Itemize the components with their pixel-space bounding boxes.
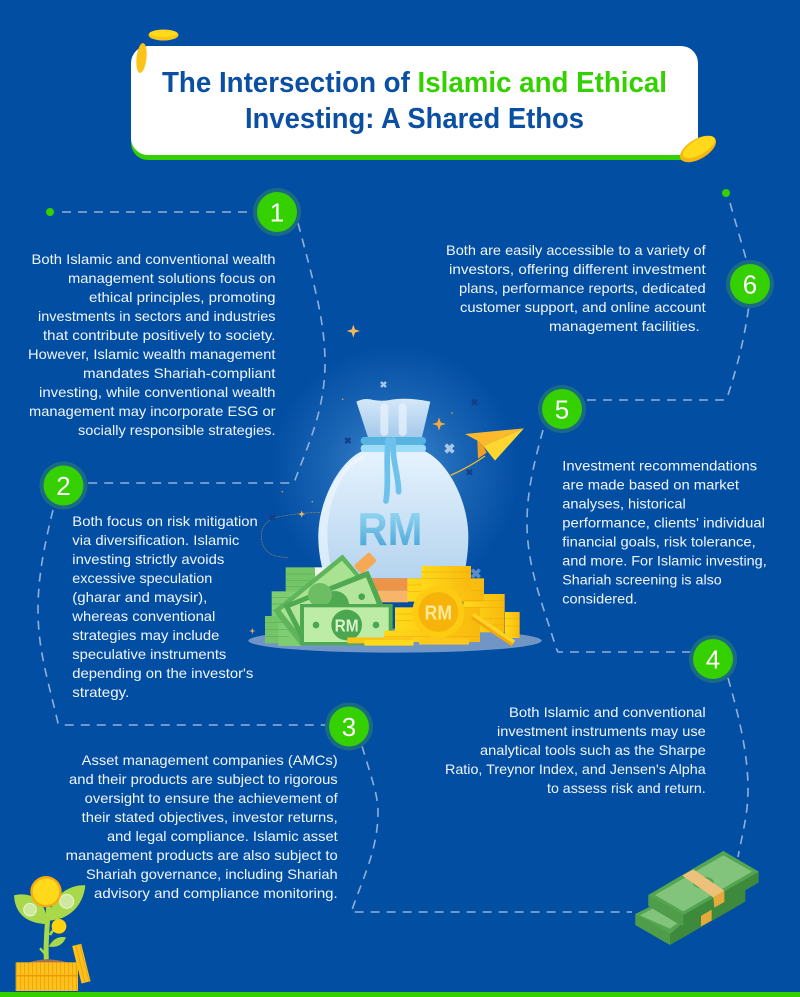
bottom green bar — [0, 992, 800, 997]
text block 3: Asset management companies (AMCs) — [82, 752, 338, 768]
text block 1: management may incorporate ESG or — [29, 403, 276, 419]
text block 5: and more. For Islamic investing, — [562, 553, 767, 569]
title text: The Intersection of Islamic and Ethical — [162, 67, 667, 99]
text block 4: to assess risk and return. — [547, 780, 706, 796]
text block 3: management products are also subject to — [66, 847, 338, 863]
text block 6 — [446, 242, 706, 334]
text block 5: analyses, historical — [562, 496, 686, 512]
number badge 6: 6 — [743, 270, 757, 300]
text block 4: Both Islamic and conventional — [509, 704, 706, 720]
text block 4: analytical tools such as the Sharpe — [480, 742, 706, 758]
number badge 3: 3 — [342, 712, 356, 742]
text block 2 — [71, 513, 258, 700]
text block 2: strategy. — [72, 684, 129, 700]
large RM coin — [412, 586, 464, 638]
icon: stacked banknotes — [635, 851, 759, 945]
text block 2: depending on the investor's — [72, 665, 253, 681]
sparkles and crosses — [249, 325, 480, 634]
text block 1: that contribute positively to society. — [43, 327, 276, 343]
text block 3: and legal compliance. Islamic asset — [107, 828, 338, 844]
text block 2: speculative instruments — [72, 646, 226, 662]
text block 2: strategies may include — [72, 627, 220, 643]
orange bundles — [354, 552, 408, 602]
text block 6: Both are easily accessible to a variety of — [446, 242, 706, 258]
text block 5: Investment recommendations — [562, 458, 757, 474]
text block 6: management facilities. — [549, 318, 700, 334]
banknotes — [273, 554, 393, 645]
text block 1 — [28, 251, 276, 438]
bag body — [318, 451, 468, 578]
number badge 6 — [726, 260, 774, 308]
title card — [131, 46, 698, 160]
text block 3: Shariah governance, including Shariah — [86, 866, 338, 882]
text block 5: Shariah screening is also — [562, 572, 722, 588]
paper plane and trails — [261, 428, 524, 557]
title text — [162, 67, 667, 135]
icon: plant growing from coin stack — [14, 876, 91, 991]
text block 1: Both Islamic and conventional wealth — [32, 251, 276, 267]
text block 1: However, Islamic wealth management — [28, 346, 276, 362]
number badge 3 — [325, 702, 373, 750]
bag tie — [361, 437, 426, 444]
text block 5 — [562, 458, 767, 607]
cash stacks — [265, 567, 334, 646]
number badge 4: 4 — [706, 644, 720, 674]
number badge 5 — [538, 385, 586, 433]
text block 1: investing, while conventional wealth — [39, 384, 276, 400]
text block 1: mandates Shariah-compliant — [83, 365, 276, 381]
title text: Investing: A Shared Ethos — [245, 103, 584, 135]
text block 2: whereas conventional — [71, 608, 215, 624]
glow behind money bag — [270, 345, 520, 595]
text block 4 — [445, 704, 706, 796]
text block 6: investors, offering different investment — [449, 261, 706, 277]
text block 5: are made based on market — [562, 477, 739, 493]
text block 2: via diversification. Islamic — [72, 532, 239, 548]
gold coin stacks — [347, 566, 520, 646]
gold coin stacks: RM — [425, 602, 452, 625]
number badge 2: 2 — [56, 471, 71, 501]
text block 2: investing strictly avoids — [72, 551, 224, 567]
icon: gold coins around title — [135, 30, 720, 168]
number badge 1 — [253, 188, 301, 236]
text block 5: financial goals, risk tolerance, — [562, 534, 756, 550]
text block 6: customer support, and online account — [460, 299, 706, 315]
text block 2: Both focus on risk mitigation — [72, 513, 258, 529]
text block 2: (gharar and maysir), — [72, 589, 207, 605]
text block 1: investments in sectors and industries — [38, 308, 276, 324]
text block 3: and their products are subject to rigorous — [69, 771, 338, 787]
text block 2: excessive speculation — [72, 570, 212, 586]
text block 1: management solutions focus on — [68, 270, 276, 286]
text block 3: advisory and compliance monitoring. — [94, 885, 338, 901]
text block 3 — [66, 752, 338, 901]
text block 4: Ratio, Treynor Index, and Jensen's Alpha — [445, 761, 706, 777]
bag neck — [356, 399, 430, 438]
number badge 4 — [689, 635, 737, 683]
text block 5: considered. — [562, 591, 637, 607]
number badge 1: 1 — [270, 198, 284, 228]
text block 5: performance, clients' individual — [562, 515, 765, 531]
text block 1: ethical principles, promoting — [89, 289, 276, 305]
illustration: money bag with cash and coins — [248, 325, 542, 653]
bag RM label: RM — [357, 503, 422, 555]
text block 3: their stated objectives, investor returns, — [82, 809, 338, 825]
ground shadow — [248, 629, 542, 653]
text block 1: socially responsible strategies. — [78, 422, 276, 438]
number badge 2 — [40, 462, 88, 510]
text block 4: investment instruments may use — [497, 723, 706, 739]
number badge 5: 5 — [555, 394, 569, 424]
text block 3: oversight to ensure the achievement of — [85, 790, 338, 806]
banknotes: RM — [335, 615, 359, 635]
dashed connector path — [38, 189, 749, 912]
text block 6: plans, performance reports, dedicated — [459, 280, 706, 296]
